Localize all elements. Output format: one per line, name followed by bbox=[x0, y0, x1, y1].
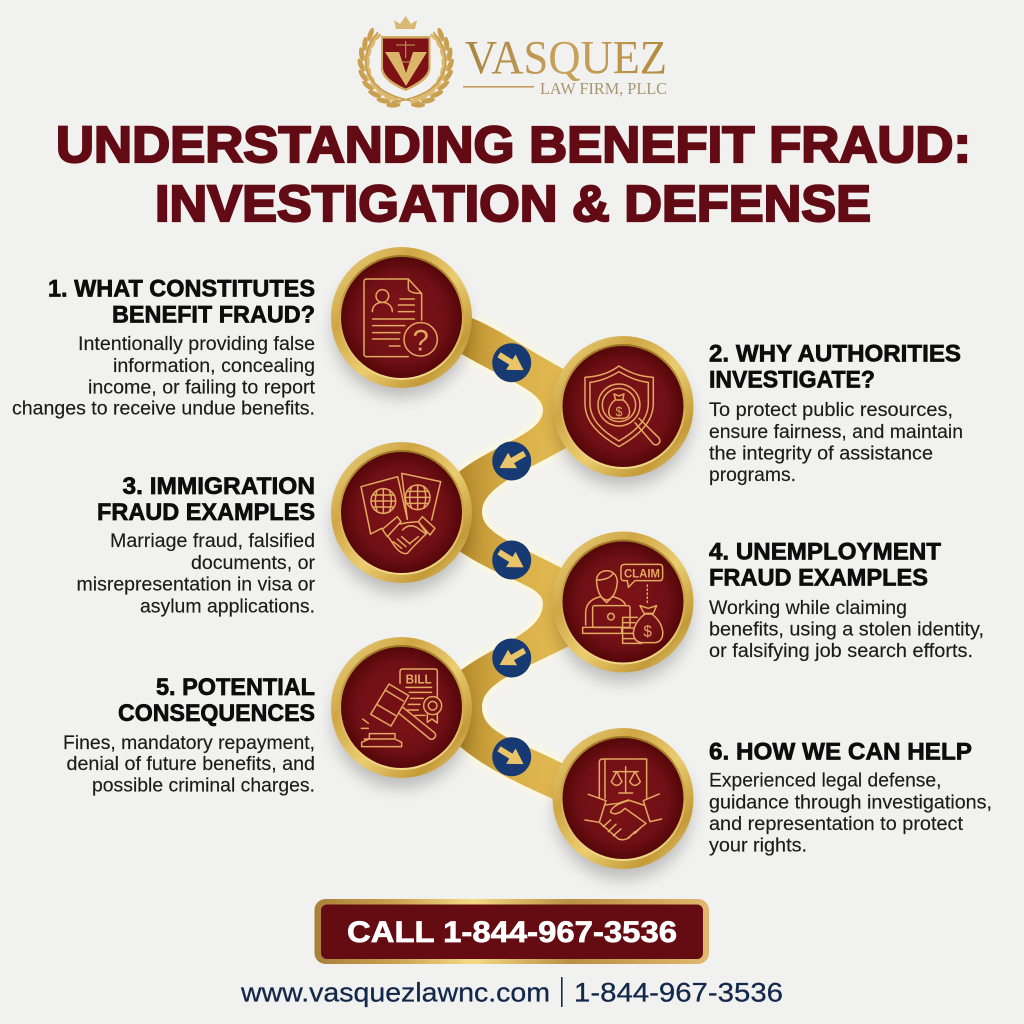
text block: step 3 bbox=[76, 473, 316, 618]
arrow badge: step 3 to 4 bbox=[492, 540, 531, 580]
contact footer: 1-844-967-3536 bbox=[574, 978, 783, 1008]
text block: step 5: 5. POTENTIAL bbox=[156, 674, 315, 701]
arrow badge: step 5 to 6 bbox=[492, 737, 531, 776]
circle shadows bbox=[333, 261, 691, 879]
text block: step 5: denial of future benefits, and bbox=[66, 754, 315, 775]
icon: person, claim bubble, money bag bbox=[583, 564, 663, 643]
text block: step 6: guidance through investigations, bbox=[709, 792, 992, 814]
icon: shield with money bag: $ bbox=[615, 405, 622, 419]
text block: step 6: and representation to protect bbox=[709, 814, 964, 835]
arrow badge: step 2 to 3 bbox=[492, 442, 531, 480]
icon: gavel, bill and seal: BILL bbox=[406, 673, 432, 687]
text block: step 3: Marriage fraud, falsified bbox=[110, 531, 315, 552]
text block: step 5: possible criminal charges. bbox=[92, 776, 315, 796]
text block: step 3: misrepresentation in visa or bbox=[76, 574, 316, 596]
step 5 badge: gavel and bill bbox=[331, 637, 472, 778]
text block: step 1 bbox=[12, 276, 316, 420]
logo: Vasquez Law Firm bbox=[356, 16, 667, 111]
text block: step 5: Fines, mandatory repayment, bbox=[63, 733, 315, 754]
arrow badge: step 4 to 5 bbox=[492, 638, 531, 678]
icon: crown bbox=[394, 16, 417, 29]
text block: step 2: INVESTIGATE? bbox=[709, 366, 875, 394]
text block: step 5: CONSEQUENCES bbox=[118, 700, 315, 727]
text block: step 4: FRAUD EXAMPLES bbox=[709, 564, 928, 592]
call to action button: CALL 1-844-967-3536 bbox=[347, 916, 677, 949]
text block: step 1: 1. WHAT CONSTITUTES bbox=[48, 276, 315, 302]
text block: step 1: information, concealing bbox=[113, 356, 315, 377]
icon: shield with money bag bbox=[585, 366, 660, 447]
step 2 badge: shield and magnifier bbox=[552, 336, 694, 477]
text block: step 2: To protect public resources, bbox=[709, 400, 953, 421]
text block: step 3: asylum applications. bbox=[140, 596, 315, 618]
divider line bbox=[463, 86, 534, 88]
text block: step 3: FRAUD EXAMPLES bbox=[97, 499, 315, 526]
icon: gavel, bill and seal bbox=[361, 669, 442, 747]
icon: laurel wreath left bbox=[356, 26, 420, 111]
text block: step 1: income, or failing to report bbox=[88, 378, 316, 398]
text block: step 2 bbox=[709, 340, 963, 486]
icon: document with question bbox=[364, 279, 437, 358]
icon: passports and handshake bbox=[361, 473, 441, 554]
wordmark: VASQUEZ bbox=[465, 32, 667, 84]
text block: step 2: programs. bbox=[709, 465, 796, 486]
text block: step 6 bbox=[709, 738, 992, 856]
contact footer: www.vasquezlawnc.com bbox=[240, 978, 550, 1008]
text block: step 6: 6. HOW WE CAN HELP bbox=[709, 738, 972, 766]
text block: step 3: documents, or bbox=[191, 553, 316, 574]
ribbon glow bbox=[462, 318, 565, 798]
step 6 badge: law book and handshake bbox=[552, 728, 694, 869]
text block: step 2: 2. WHY AUTHORITIES bbox=[709, 340, 961, 368]
icon: book, scales, handshake bbox=[585, 759, 662, 840]
text block: step 1: BENEFIT FRAUD? bbox=[112, 302, 315, 328]
connector ribbon bbox=[455, 318, 580, 802]
subtitle: LAW FIRM, PLLC bbox=[540, 79, 667, 98]
text block: step 4: benefits, using a stolen identity, bbox=[709, 620, 984, 640]
text block: step 2: ensure fairness, and maintain bbox=[709, 422, 963, 443]
text block: step 4 bbox=[709, 538, 984, 662]
title: INVESTIGATION & DEFENSE bbox=[155, 175, 871, 232]
step 3 badge: passports and handshake bbox=[331, 442, 472, 583]
icon: person, claim bubble, money bag: CLAIM bbox=[624, 567, 660, 581]
text block: step 6: your rights. bbox=[709, 836, 807, 856]
icon: person, claim bubble, money bag: $ bbox=[643, 624, 652, 641]
step 4 badge: claimant with laptop and money bag bbox=[552, 532, 694, 672]
text block: step 4: 4. UNEMPLOYMENT bbox=[709, 538, 941, 566]
text block: step 5 bbox=[63, 674, 315, 796]
arrow badge: step 1 to 2 bbox=[492, 343, 531, 382]
text block: step 4: or falsifying job search efforts. bbox=[709, 641, 973, 662]
title: UNDERSTANDING BENEFIT FRAUD: bbox=[56, 116, 971, 173]
text block: step 2: the integrity of assistance bbox=[709, 444, 933, 464]
text block: step 3: 3. IMMIGRATION bbox=[122, 473, 315, 500]
text block: step 1: Intentionally providing false bbox=[78, 334, 315, 355]
icon: laurel wreath right bbox=[391, 26, 456, 111]
text block: step 1: changes to receive undue benefits. bbox=[12, 398, 315, 420]
call to action button bbox=[314, 899, 709, 964]
text block: step 6: Experienced legal defense, bbox=[709, 770, 942, 792]
icon: shield bbox=[381, 36, 430, 91]
title bbox=[56, 116, 971, 232]
step 1 badge: document with question mark bbox=[331, 247, 472, 388]
contact footer bbox=[240, 977, 783, 1008]
icon: document with question: ? bbox=[413, 325, 429, 358]
text block: step 4: Working while claiming bbox=[709, 598, 907, 619]
